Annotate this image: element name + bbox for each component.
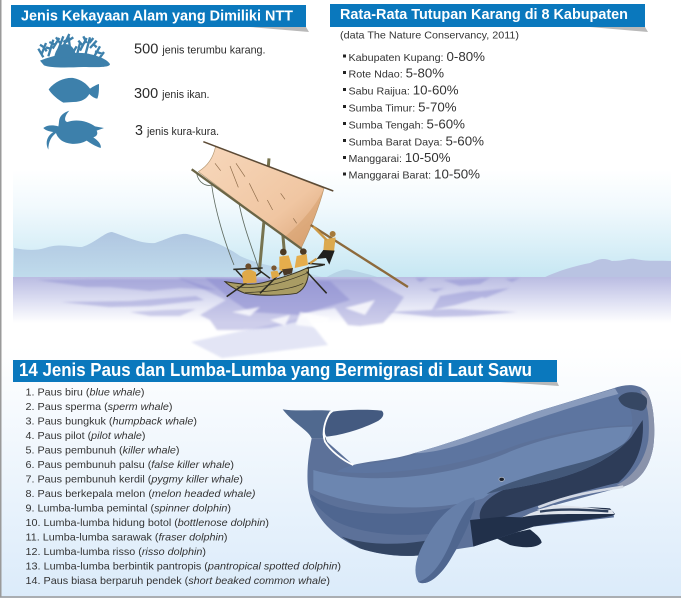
left mountains [14,232,325,278]
list: coral cover by district: Manggarai: 10-50% [348,150,451,165]
icon: fish [49,78,99,103]
list: 14 whale and dolphin species: 10. Lumba-lumba hidung botol ( bottlenose dolphin) [26,517,269,529]
heading: whales and dolphins: 14 Jenis Paus dan Lumba-Lumba yang Bermigrasi di Laut Sawu [19,360,532,380]
eye [499,477,504,481]
sail shading [285,188,324,249]
text: data source: (data The Nature Conservancy, 2011) [340,30,519,42]
flank light band [313,427,633,507]
icon: coral [38,34,110,67]
list: coral cover by district: Sabu Raijua: 10-60% [348,82,459,98]
list: 14 whale and dolphin species: 2. Paus sperma (sperm whale) [26,401,172,413]
text: coral count: 500 jenis terumbu karang. [134,42,266,58]
heading: coral cover [330,4,648,32]
list: 14 whale and dolphin species: 13. Lumba-lumba berbintik pantropis ( pantropical spotted dolphin ) [26,560,341,572]
list: 14 whale and dolphin species: 1. Paus biru (blue whale) [26,386,144,398]
body [307,385,654,556]
teeth [522,505,614,517]
far islet [325,269,380,278]
lower flank band [310,493,470,535]
text: turtle count: 3 jenis kura-kura. [135,123,219,139]
man at the mast [295,248,308,268]
list: coral cover by district: Manggarai Barat: 10-50% [348,166,480,182]
list: 14 whale and dolphin species: 5. Paus pembunuh (killer whale) [26,444,180,456]
list: 14 whale and dolphin species: 9. Lumba-lumba pemintal ( spinner dolphin) [26,502,231,514]
heading: coral cover: Rata-Rata Tutupan Karang di 8 Kabupaten [340,6,628,23]
sky [13,170,671,278]
upper back band [337,390,632,473]
right fluke [325,410,383,437]
long pole [311,225,408,287]
pectoral fin shadow side [497,529,542,547]
hull [225,267,309,295]
head dark side [480,420,643,524]
illustration: sperm whale [283,385,654,583]
heading: natural wealth [11,5,309,32]
sail [198,146,324,249]
lower jaw [470,507,615,547]
list: coral cover by district: Sumba Barat Daya: 5-60% [348,134,484,148]
list: 14 whale and dolphin species: 4. Paus pilot (pilot whale) [26,430,146,442]
water ripples [37,278,520,330]
icon: turtle [43,111,104,150]
heading: natural wealth: Jenis Kekayaan Alam yang Dimiliki NTT [21,8,293,25]
masts [259,158,284,272]
list: 14 whale and dolphin species: 7. Paus pembunuh kerdil ( pygmy killer whale) [26,474,243,486]
tail highlight line [324,412,353,465]
back highlight [413,388,618,453]
list: 14 whale and dolphin species: 6. Paus pembunuh palsu ( false killer whale) [26,459,234,471]
list: 14 whale and dolphin species: 11. Lumba-lumba sarawak ( fraser dolphin) [26,532,228,544]
sea band [13,277,671,323]
list: coral cover by district: Rote Ndao: 5-80% [348,66,444,80]
list: coral cover by district: Kabupaten Kupang: 0-80% [348,49,485,64]
ropes [197,173,258,267]
head mid shade [487,435,633,494]
head rim [617,390,654,487]
sail reflection [191,317,328,358]
text: fish count: 300 jenis ikan. [134,86,210,102]
list: coral cover by district [343,49,485,182]
panel: sea scene [13,170,671,358]
belly band [342,533,457,556]
snout cap [618,392,647,411]
tail stock shadow [323,437,353,465]
standing man [279,249,293,276]
list: 14 whale and dolphin species: 3. Paus bungkuk (humpback whale) [26,416,197,428]
list: 14 whale and dolphin species: 14. Paus biasa berparuh pendek ( short beaked common whale ) [26,575,330,587]
man on the outrigger [310,227,336,265]
right mountains [543,259,671,278]
mouth edge [538,487,623,507]
list: coral cover by district: Sumba Timur: 5-70% [348,100,457,114]
seated man [242,263,257,283]
list: coral cover by district: Sumba Tengah: 5-60% [348,116,465,132]
jaw interior [540,510,608,512]
white water highlights [232,300,375,328]
oars and beams [227,263,327,297]
boom [192,169,302,249]
yard [203,142,333,191]
left fluke [283,409,331,438]
flipper [415,497,475,583]
list: 14 whale and dolphin species: 8. Paus berkepala melon ( melon headed whale) [26,488,256,500]
list: 14 whale and dolphin species [26,386,341,587]
small man [271,265,280,279]
flipper shade [418,501,475,583]
list: 14 whale and dolphin species: 12. Lumba-lumba risso ( risso dolphin) [26,546,206,558]
illustration: sailing boat with crew [192,142,408,297]
sail creases [215,163,297,223]
hull planks [237,273,307,293]
